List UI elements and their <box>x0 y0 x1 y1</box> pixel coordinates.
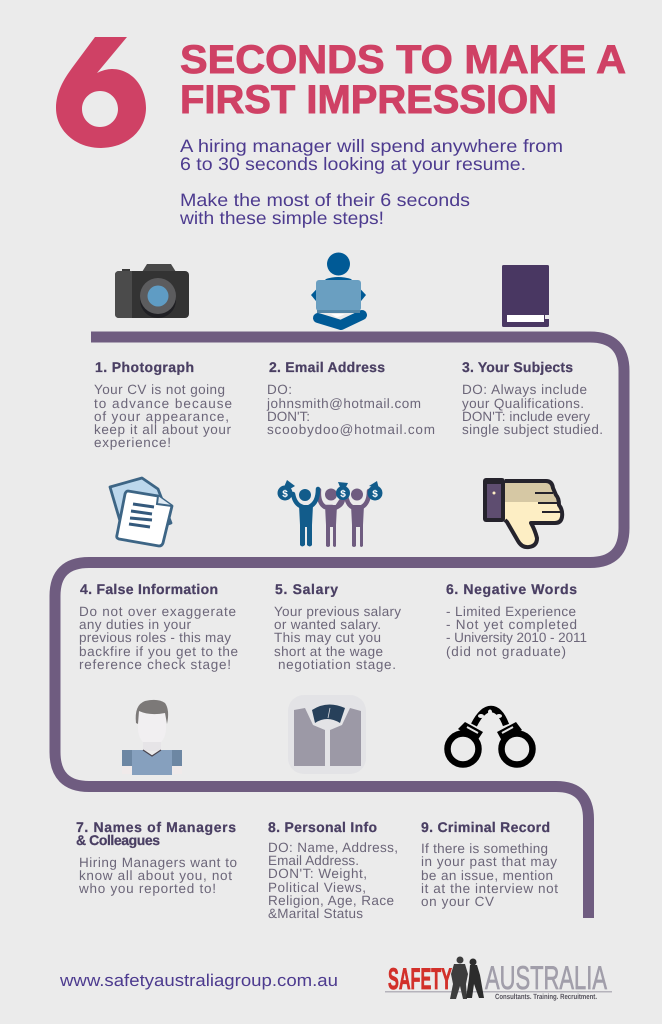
intro text: with these simple steps! <box>179 208 384 228</box>
heading and text: 7. Names of Managers: 7. Names of Managers <box>76 819 236 835</box>
heading and text: 5. Salary: This may cut you <box>274 630 381 645</box>
logo: Safety Australia <box>385 956 612 1001</box>
icon: three people with money bags: $ <box>282 489 288 500</box>
heading and text: 5. Salary: negotiation stage. <box>278 657 396 672</box>
heading and text: 3. Your Subjects: DON'T: include every <box>462 409 590 424</box>
title: FIRST IMPRESSION <box>180 78 557 122</box>
heading and text: 5. Salary: or wanted salary. <box>274 617 381 632</box>
heading and text: 1. Photograph: to advance because <box>94 396 232 411</box>
heading and text: 5. Salary: short at the wage <box>274 644 383 659</box>
heading and text: 8. Personal Info: 8. Personal Info <box>268 819 377 835</box>
icon: thumbs down <box>483 478 562 547</box>
heading and text: 6. Negative Words <box>446 581 587 659</box>
heading and text: 4. False Information: reference check stage! <box>79 657 231 672</box>
heading and text: 6. Negative Words: - Limited Experience <box>446 604 576 619</box>
heading and text: 3. Your Subjects <box>462 359 603 437</box>
heading and text: 4. False Information: any duties in your <box>79 617 192 632</box>
logo: Safety Australia: SAFETY <box>388 963 452 996</box>
heading and text: 9. Criminal Record: it at the interview not <box>421 881 558 896</box>
website url: www.safetyaustraliagroup.com.au <box>59 971 338 990</box>
icon: handcuffs <box>448 709 532 764</box>
heading and text: 7. Names of Managers: who you reported to! <box>78 881 216 896</box>
heading and text: 3. Your Subjects: DO: Always include <box>462 382 587 397</box>
heading and text: 2. Email Address: DON'T: <box>267 409 310 424</box>
heading and text: 6. Negative Words: - University 2010 - 2011 <box>446 630 587 645</box>
heading and text: 8. Personal Info: Political Views, <box>268 880 366 895</box>
heading and text: 8. Personal Info: DO: Name, Address, <box>268 840 398 855</box>
heading and text: 4. False Information: backfire if you get to the <box>79 644 238 659</box>
heading and text: 4. False Information <box>79 581 238 672</box>
heading and text: 1. Photograph: of your appearance, <box>94 409 229 424</box>
heading and text: 9. Criminal Record: be an issue, mention <box>421 868 553 883</box>
heading and text: 7. Names of Managers: & Colleagues <box>76 832 160 848</box>
heading and text: 1. Photograph <box>94 359 232 450</box>
heading and text: 1. Photograph: Your CV is not going <box>94 382 225 397</box>
heading and text: 3. Your Subjects: 3. Your Subjects <box>462 359 573 375</box>
heading and text: 1. Photograph: experience! <box>94 435 171 450</box>
heading and text: 2. Email Address: 2. Email Address <box>269 359 385 375</box>
heading and text: 3. Your Subjects: single subject studied. <box>462 422 603 437</box>
heading and text: 9. Criminal Record: on your CV <box>421 894 494 909</box>
icon: man portrait <box>122 700 182 775</box>
icon: camera <box>115 264 189 318</box>
heading and text: 7. Names of Managers: know all about you, not <box>79 868 232 883</box>
heading and text: 2. Email Address: johnsmith@hotmail.com <box>266 396 421 411</box>
heading and text: 8. Personal Info: Religion, Age, Race <box>268 893 394 908</box>
icon: three people with money bags: $ <box>340 489 346 500</box>
heading and text: 6. Negative Words: (did not graduate) <box>446 644 566 659</box>
heading and text: 1. Photograph: 1. Photograph <box>95 359 194 375</box>
heading and text: 2. Email Address <box>266 359 435 437</box>
intro text: A hiring manager will spend anywhere from <box>180 136 563 156</box>
winding path line <box>55 337 624 918</box>
intro text <box>179 136 563 228</box>
heading and text: 4. False Information: Do not over exaggerate <box>79 604 236 619</box>
heading and text: 5. Salary: 5. Salary <box>275 581 338 597</box>
big number 6 <box>56 37 146 148</box>
icon: book <box>502 265 549 327</box>
icon: three people with money bags: $ <box>372 489 378 500</box>
heading and text: 4. False Information: previous roles - this may <box>79 630 231 645</box>
heading and text: 8. Personal Info <box>268 819 398 921</box>
icon: person with laptop <box>311 252 366 325</box>
heading and text: 6. Negative Words: 6. Negative Words <box>446 581 577 597</box>
heading and text: 8. Personal Info: DON'T: Weight, <box>268 866 367 881</box>
heading and text: 3. Your Subjects: your Qualifications. <box>462 396 584 411</box>
heading and text: 2. Email Address: scoobydoo@hotmail.com <box>267 422 435 437</box>
heading and text: 2. Email Address: DO: <box>267 382 292 397</box>
icon: documents <box>110 478 172 546</box>
logo: Safety Australia: Consultants. Training. Recruitment. <box>495 992 597 1001</box>
heading and text: 7. Names of Managers: Hiring Managers want to <box>79 855 237 870</box>
heading and text: 9. Criminal Record <box>421 819 558 909</box>
icon: weighing scale <box>288 695 366 774</box>
heading and text: 9. Criminal Record: If there is something <box>421 841 548 856</box>
icon: three people with money bags <box>278 480 382 547</box>
heading and text: 8. Personal Info: Email Address. <box>268 853 359 868</box>
title <box>180 38 626 122</box>
heading and text: 7. Names of Managers <box>76 819 237 896</box>
title: SECONDS TO MAKE A <box>180 38 626 82</box>
intro text: Make the most of their 6 seconds <box>180 190 470 210</box>
heading and text: 6. Negative Words: - Not yet completed <box>446 617 577 632</box>
heading and text: 5. Salary <box>274 581 401 672</box>
heading and text: 4. False Information: 4. False Information <box>80 581 218 597</box>
heading and text: 9. Criminal Record: in your past that may <box>421 854 557 869</box>
intro text: 6 to 30 seconds looking at your resume. <box>180 154 526 174</box>
heading and text: 8. Personal Info: &Marital Status <box>268 906 363 921</box>
heading and text: 9. Criminal Record: 9. Criminal Record <box>421 819 550 835</box>
heading and text: 5. Salary: Your previous salary <box>274 604 401 619</box>
heading and text: 1. Photograph: keep it all about your <box>94 422 232 437</box>
